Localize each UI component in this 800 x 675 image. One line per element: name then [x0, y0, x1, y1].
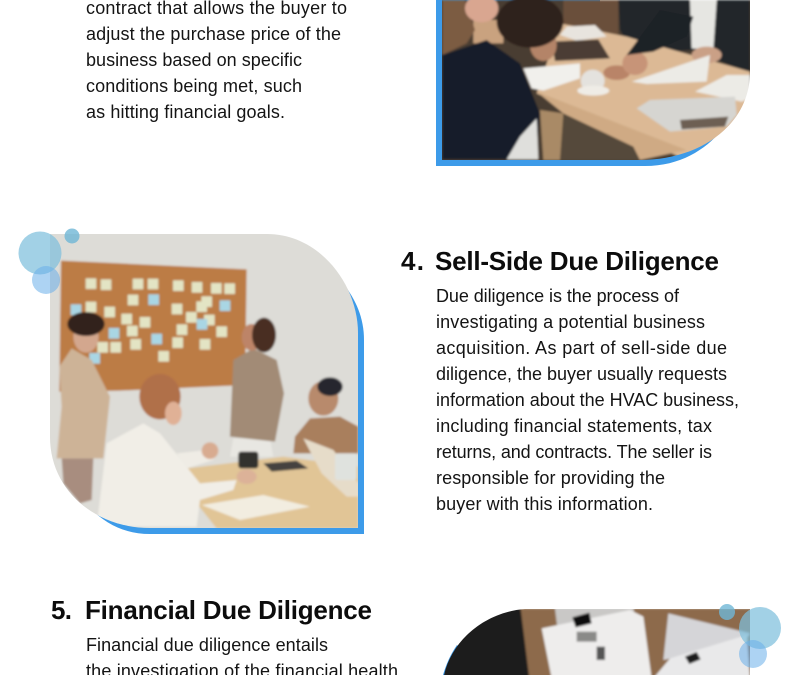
table	[187, 457, 358, 528]
text block: step 4 description: information about the HVAC business,	[436, 390, 739, 410]
text block: step 4 description: acquisition. As part of sell-side due	[436, 338, 727, 358]
photo: team at cork board	[47, 230, 364, 534]
text block: step 5 description	[86, 635, 398, 675]
decorative bubbles: bottom right	[719, 604, 781, 668]
text block: step 3 description: business based on specific	[86, 50, 302, 70]
photo frame: blue accent	[436, 0, 722, 166]
text block: step 3 description: adjust the purchase price of the	[86, 24, 341, 44]
photo: business meeting at table	[436, 0, 753, 166]
step 4 heading: 4.	[401, 246, 424, 276]
text block: step 3 description	[86, 0, 347, 122]
seated man front	[97, 423, 237, 527]
photo frame: blue accent	[443, 645, 462, 675]
step 5 heading: 5.	[51, 595, 72, 625]
seated man right	[293, 417, 358, 453]
table items	[238, 452, 258, 468]
text block: step 3 description: conditions being met, such	[86, 76, 302, 96]
text block: step 4 description: Due diligence is the process of	[436, 286, 680, 306]
photo image: people reviewing documents	[440, 0, 753, 163]
text block: step 3 description: as hitting financial goals.	[86, 102, 285, 122]
decorative bubbles: top left	[18, 228, 80, 294]
text block: step 4 description: including financial statements, tax	[436, 416, 712, 436]
sticky notes	[86, 278, 235, 362]
standing woman left	[62, 458, 93, 503]
text block: step 5 description: Financial due diligence entails	[86, 635, 328, 655]
step 4 heading: Sell-Side Due Diligence	[435, 246, 719, 276]
step 5 heading: Financial Due Diligence	[85, 595, 372, 625]
photo: documents on desk	[443, 608, 753, 675]
standing woman right	[230, 438, 273, 457]
text block: step 4 description	[436, 286, 739, 514]
text block: step 4 description: returns, and contracts. The seller is	[436, 442, 712, 462]
text block: step 4 description: diligence, the buyer usually requests	[436, 364, 727, 384]
text block: step 4 description: buyer with this information.	[436, 494, 653, 514]
text block: step 4 description: responsible for providing the	[436, 468, 665, 488]
photo image: colleagues brainstorming	[47, 230, 363, 533]
text block: step 4 description: investigating a potential business	[436, 312, 705, 332]
photo image: papers with binder clips	[443, 608, 753, 675]
photo frame: blue accent	[88, 283, 364, 534]
